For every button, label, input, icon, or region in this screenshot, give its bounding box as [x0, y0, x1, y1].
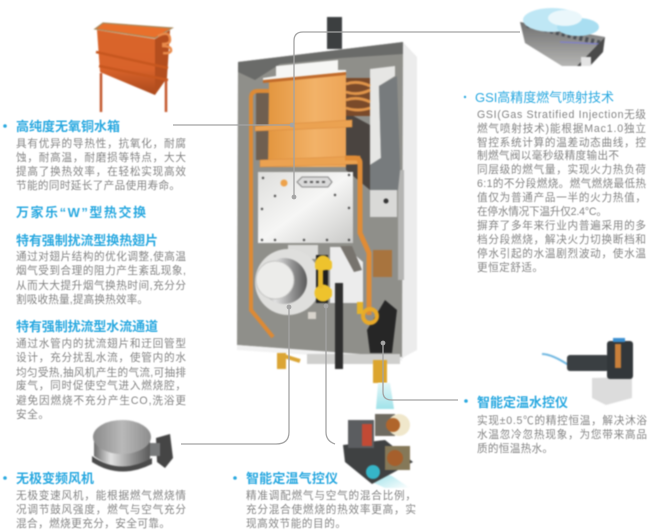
section: water channel: [16, 319, 186, 421]
leader end dots: [287, 123, 385, 345]
water outlet fitting: [373, 360, 387, 383]
leader: gas control: [326, 306, 335, 444]
icon: water control valve: [542, 338, 633, 405]
icon: gas control valve: [343, 414, 413, 488]
body text: 制燃气阀以毫秒级精度输出不: [477, 149, 619, 162]
gas inlet fitting: [277, 353, 300, 369]
body text: 无极变速风机，能根据燃气燃烧情: [16, 489, 186, 502]
right copper pipe: [345, 158, 369, 315]
body text: 停水引起的水温剧烈波动，使水温: [477, 247, 646, 260]
body text: 设计，充分扰乱水流，使管内的水: [16, 351, 186, 364]
black drain pipe: [335, 283, 343, 368]
leader: GSI burner: [294, 32, 520, 196]
coils behind exchanger: [346, 78, 370, 116]
body text: 档分段燃烧，解决火力切换断档和: [477, 233, 646, 246]
body text: 水温忽冷忽热现象，为您带来高品: [477, 428, 647, 441]
body text: 安全。: [16, 408, 49, 421]
body text: [477, 414, 647, 455]
leader: fan: [181, 307, 289, 444]
body text: 同层级的燃气量，实现火力热负荷: [477, 163, 646, 176]
white pipework: [330, 247, 363, 303]
heading: 无极变频风机: [16, 471, 94, 486]
gold ring: [363, 309, 377, 323]
body text: 割吸收热量,提高换热效率。: [16, 293, 148, 306]
body text: [16, 337, 186, 421]
section: GSI: [464, 90, 646, 274]
body text: [16, 137, 186, 192]
body text: 实现±0.5℃的精控恒温，解决沐浴: [477, 414, 647, 427]
section: water control: [464, 395, 647, 455]
dark chamber beside exchanger: [346, 112, 370, 190]
icon: variable frequency fan: [92, 420, 173, 472]
heading: 特有强制扰流型水流通道: [16, 319, 158, 334]
body text: 混合，燃烧更充分，安全可靠。: [16, 517, 170, 530]
body text: [16, 250, 186, 306]
body text: 在停水情况下温升仅2.4°C。: [477, 205, 607, 218]
body text: 通过对翅片结构的优化调整,使高温: [16, 250, 186, 263]
orange indicator: [280, 180, 288, 186]
body text: [16, 489, 186, 530]
body text: 具有优异的导热性，抗氧化，耐腐: [16, 137, 186, 150]
body text: 避免因燃烧不充分产生CO,洗浴更: [16, 394, 186, 407]
hexagon connector: [297, 177, 332, 187]
body text: 质的恒温热水。: [477, 442, 553, 455]
bullet: [3, 476, 7, 480]
bullet: [464, 96, 466, 98]
bullet: [464, 399, 468, 403]
white top insulation block: [263, 60, 346, 81]
section: fan: [3, 471, 186, 530]
body text: 精准调配燃气与空气的混合比例，: [246, 489, 416, 502]
brown recess behind exchanger: [256, 92, 270, 160]
right control box: [370, 190, 397, 217]
bullet: [3, 124, 7, 128]
body text: 燃气喷射技术)能根据Mac1.0独立: [477, 122, 646, 135]
heading: 智能定温气控仪: [246, 471, 338, 486]
heading: GSI高精度燃气喷射技术: [475, 90, 614, 105]
heading: 特有强制扰流型换热翅片: [16, 233, 158, 248]
bullet: [233, 476, 237, 480]
body text: 况调节鼓风强度，燃气与空气充分: [16, 503, 186, 516]
section: copper water tank: [3, 119, 186, 192]
yellow gas valve: [314, 255, 332, 303]
copper bracket: [373, 250, 392, 277]
body text: 值仅为普通产品一半的火力热值，: [477, 191, 646, 204]
body text: 充分混合使燃烧的热效率更高，实: [246, 503, 416, 516]
fan assembly: [255, 245, 321, 319]
body text: 废气，同时促使空气进入燃烧腔，: [16, 379, 186, 392]
control panel plate: [258, 172, 353, 243]
body text: 均匀受热,抽风机产生的气流,可抽排: [16, 366, 186, 379]
icon: copper water tank: [95, 23, 172, 112]
body text: 摒弃了多年来行业内普遍采用的多: [477, 219, 646, 232]
body text: 提高了换热效率，在轻松实现高效: [16, 165, 186, 178]
leader: water control: [383, 343, 458, 400]
water valve black body: [367, 300, 397, 353]
right side panel of casing: [402, 42, 417, 358]
back panel of casing: [237, 42, 403, 358]
body text: 节能的同时延长了产品使用寿命。: [16, 179, 180, 192]
right upper plate: [370, 66, 395, 165]
body text: 从而大大提升烟气换热时间,充分分: [16, 279, 186, 292]
body text: 通过水管内的扰流翅片和迂回管型: [16, 337, 186, 350]
water heater cutaway illustration: [237, 17, 417, 383]
section: gas control: [233, 471, 416, 530]
icon: GSI burner: [520, 8, 605, 66]
body text: [246, 489, 416, 530]
chimney flue: [327, 17, 342, 49]
leader: copper tank: [173, 124, 292, 126]
body text: GSI(Gas Stratified Injection无级: [477, 109, 646, 121]
section: fins: [16, 233, 186, 306]
bottom lip of casing: [237, 345, 402, 361]
copper heat exchanger: [255, 72, 360, 167]
heading: 智能定温水控仪: [477, 395, 568, 410]
body text: [477, 109, 646, 274]
body text: 更恒定舒适。: [477, 261, 543, 274]
left copper pipe: [251, 91, 273, 337]
leader lines: [173, 32, 520, 444]
body text: 现高效节能的目的。: [246, 517, 346, 530]
body text: 蚀，耐高温，耐磨损等特点，大大: [16, 151, 186, 164]
body text: 6:1的不分段燃烧。燃气燃烧最低热: [477, 177, 646, 190]
top rim of casing: [238, 42, 403, 80]
body text: 烟气受到合理的阻力产生紊乱现象,: [16, 264, 186, 277]
body text: 智控系统计算的温差动态曲线，控: [477, 136, 646, 149]
cyan water beam: [376, 383, 394, 409]
heading: W heat exchange: 万家乐“W”型热交换: [16, 205, 146, 220]
bottom mounting bracket: [307, 354, 400, 364]
heading: 高纯度无氧铜水箱: [16, 119, 120, 134]
